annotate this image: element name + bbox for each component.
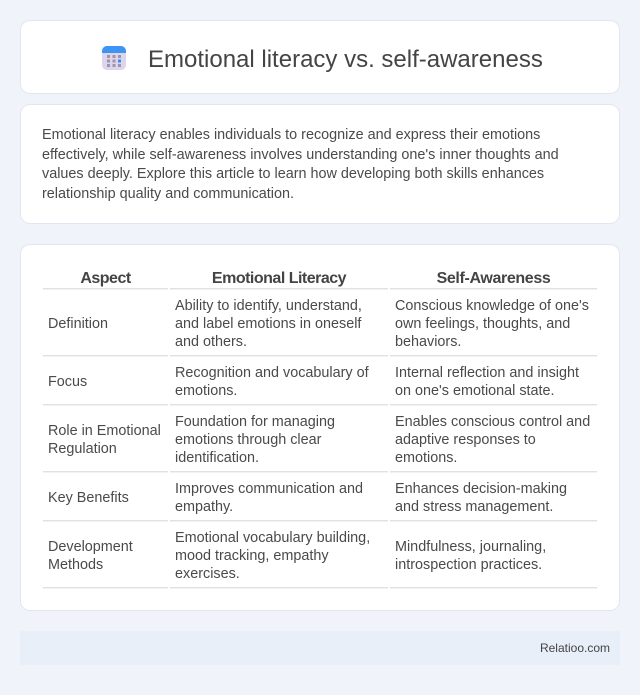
header: Self-Awareness: Self-Awareness [437, 270, 550, 287]
row: Development Methods: mood tracking, empathy [175, 548, 329, 564]
row: Role in Emotional Regulation: identification. [175, 450, 259, 466]
header: Emotional Literacy: Emotional Literacy [212, 270, 346, 287]
row: Role in Emotional Regulation: Enables conscious control and [395, 414, 590, 430]
intro text: effectively, while self-awareness involves understanding one's inner thoughts and [42, 146, 559, 162]
row: Definition: and others. [175, 334, 247, 350]
row: Role in Emotional Regulation: emotions through clear [175, 432, 321, 448]
row: Development Methods: exercises. [175, 566, 240, 582]
row: Key Benefits [48, 481, 567, 515]
table [43, 270, 597, 589]
table card [20, 244, 620, 611]
row: Role in Emotional Regulation: emotions. [395, 450, 457, 466]
row: Definition: Conscious knowledge of one's [395, 298, 589, 314]
row: Development Methods: introspection practices. [395, 557, 542, 573]
icon: calendar [102, 46, 126, 70]
row: Role in Emotional Regulation: Foundation for managing [175, 414, 335, 430]
intro text: values deeply. Explore this article to learn how developing both skills enhances [42, 166, 544, 182]
row: Key Benefits: Improves communication and [175, 481, 363, 497]
row: Focus: Focus [48, 374, 87, 390]
row: Key Benefits: and stress management. [395, 499, 553, 515]
row: Definition [48, 298, 589, 350]
footer bar [20, 631, 620, 665]
title: Emotional literacy vs. self-awareness [148, 46, 543, 73]
row: Role in Emotional Regulation: Regulation [48, 441, 117, 457]
row: Key Benefits: Key Benefits [48, 490, 129, 506]
row: Development Methods: Methods [48, 557, 103, 573]
row: Definition: behaviors. [395, 334, 461, 350]
footer text: Relatioo.com [540, 641, 610, 655]
intro text [42, 127, 559, 202]
header: Aspect: Aspect [80, 270, 131, 287]
row: Development Methods: Development [48, 539, 133, 555]
row: Definition: Definition [48, 316, 108, 332]
row: Role in Emotional Regulation: Role in Emotional [48, 423, 161, 439]
row: Focus: on one's emotional state. [395, 383, 555, 399]
row: Key Benefits: Enhances decision-making [395, 481, 567, 497]
intro text: Emotional literacy enables individuals to recognize and express their emotions [42, 127, 540, 143]
row: Focus [48, 365, 579, 399]
row: Role in Emotional Regulation [48, 414, 590, 466]
row: Definition: own feelings, thoughts, and [395, 316, 570, 332]
row: Focus: emotions. [175, 383, 237, 399]
row: Development Methods: Mindfulness, journaling, [395, 539, 546, 555]
intro text: relationship quality and communication. [42, 186, 294, 202]
row: Development Methods: Emotional vocabulary building, [175, 530, 370, 546]
row: Definition: and label emotions in oneself [175, 316, 361, 332]
row: Focus: Recognition and vocabulary of [175, 365, 369, 381]
row: Focus: Internal reflection and insight [395, 365, 579, 381]
row: Development Methods [48, 530, 546, 582]
row: Key Benefits: empathy. [175, 499, 233, 515]
title card [20, 20, 620, 94]
row: Definition: Ability to identify, understand, [175, 298, 362, 314]
row: Role in Emotional Regulation: adaptive responses to [395, 432, 536, 448]
intro card [20, 104, 620, 224]
